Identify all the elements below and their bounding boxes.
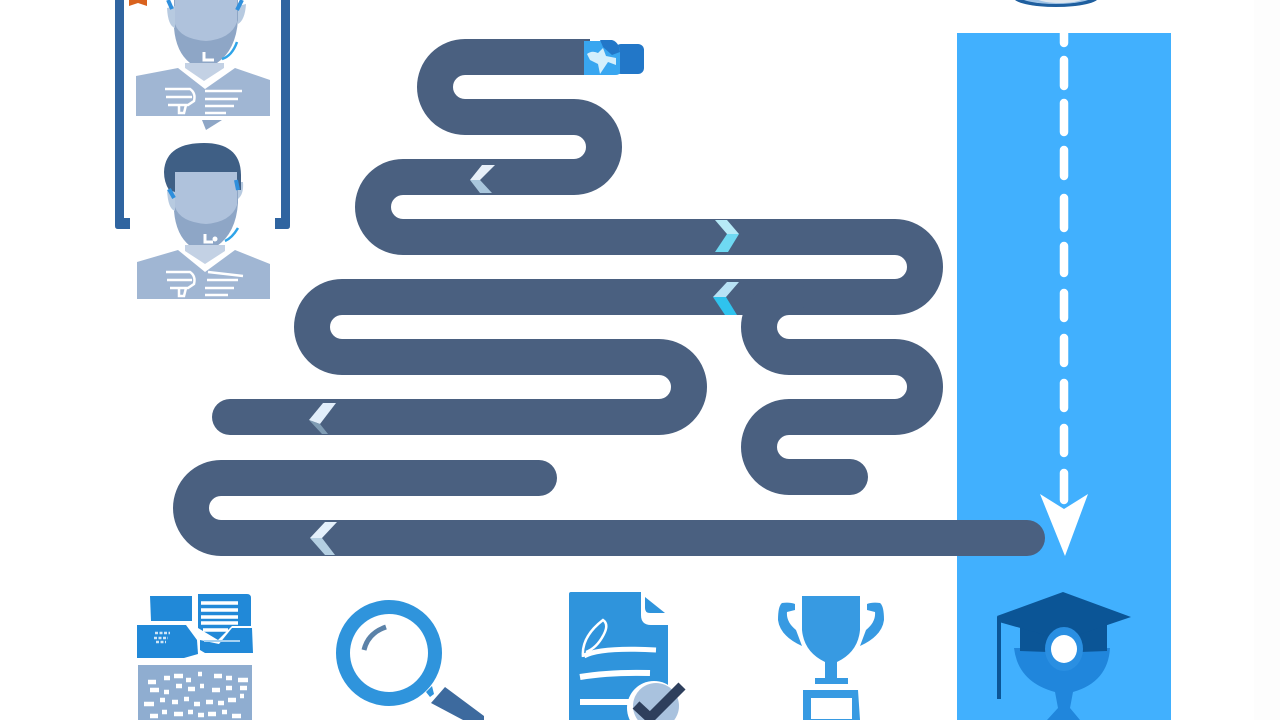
person: bottom portrait bbox=[137, 143, 270, 299]
icon: signed document with check bbox=[569, 592, 682, 720]
path start marker bbox=[584, 40, 644, 75]
person: top portrait bbox=[136, 0, 270, 130]
arrow: path chevron row 7 bbox=[309, 403, 336, 434]
bracket: left and right rails bbox=[115, 0, 290, 229]
icon: magnifying glass bbox=[343, 607, 484, 720]
arrow: dashed line head bbox=[1040, 494, 1088, 556]
badge: cropped emblem at top bbox=[1013, 0, 1099, 7]
winding main path bbox=[191, 57, 1027, 538]
icon: orange bookmark bbox=[129, 0, 147, 6]
icon: documents and chat bbox=[137, 594, 253, 720]
arrow: path chevron row 5 bbox=[713, 282, 739, 315]
arrow: path chevron row 9 bbox=[310, 522, 337, 555]
panel: graduation column bbox=[957, 33, 1171, 720]
icon: trophy bbox=[778, 596, 884, 720]
arrow: path chevron row 4 bbox=[715, 220, 739, 252]
arrow: path chevron row 3 bbox=[470, 165, 495, 193]
icon: graduate with cap bbox=[997, 592, 1131, 720]
